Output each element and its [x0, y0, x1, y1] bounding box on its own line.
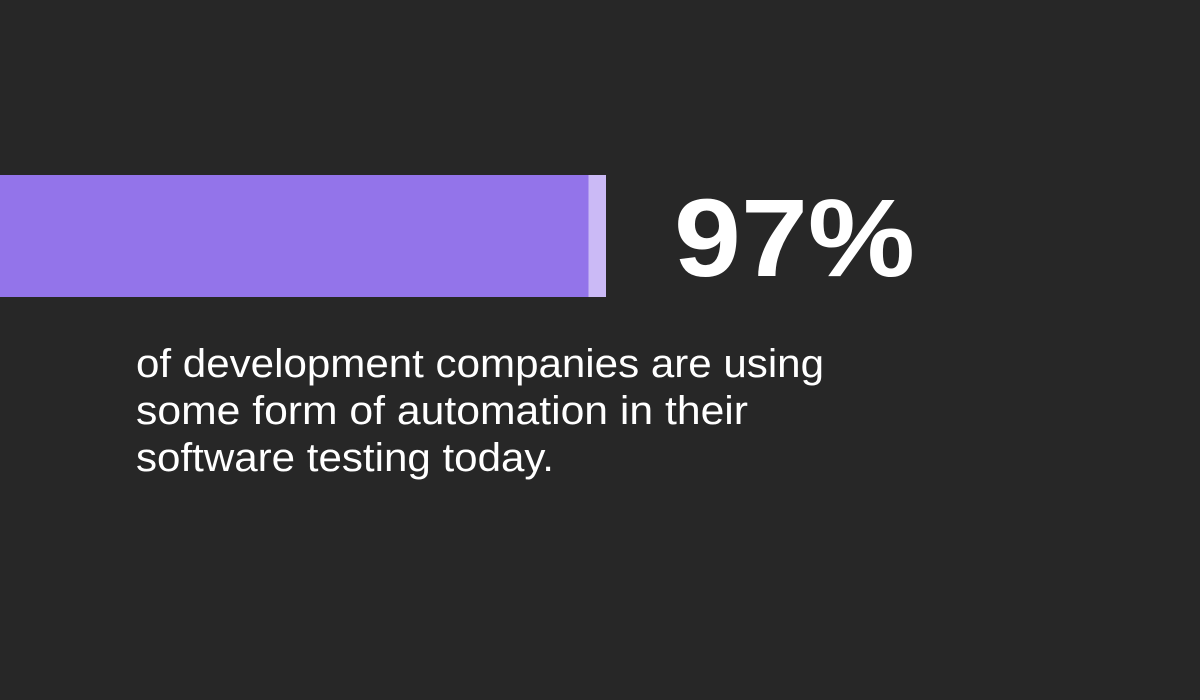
- description text: some form of automation in their: [136, 389, 748, 433]
- description text: software testing today.: [136, 436, 554, 480]
- description text: [136, 342, 824, 480]
- description text: of development companies are using: [136, 342, 824, 386]
- statistic: 97%: 97%: [674, 177, 915, 300]
- progress bar: [0, 175, 606, 297]
